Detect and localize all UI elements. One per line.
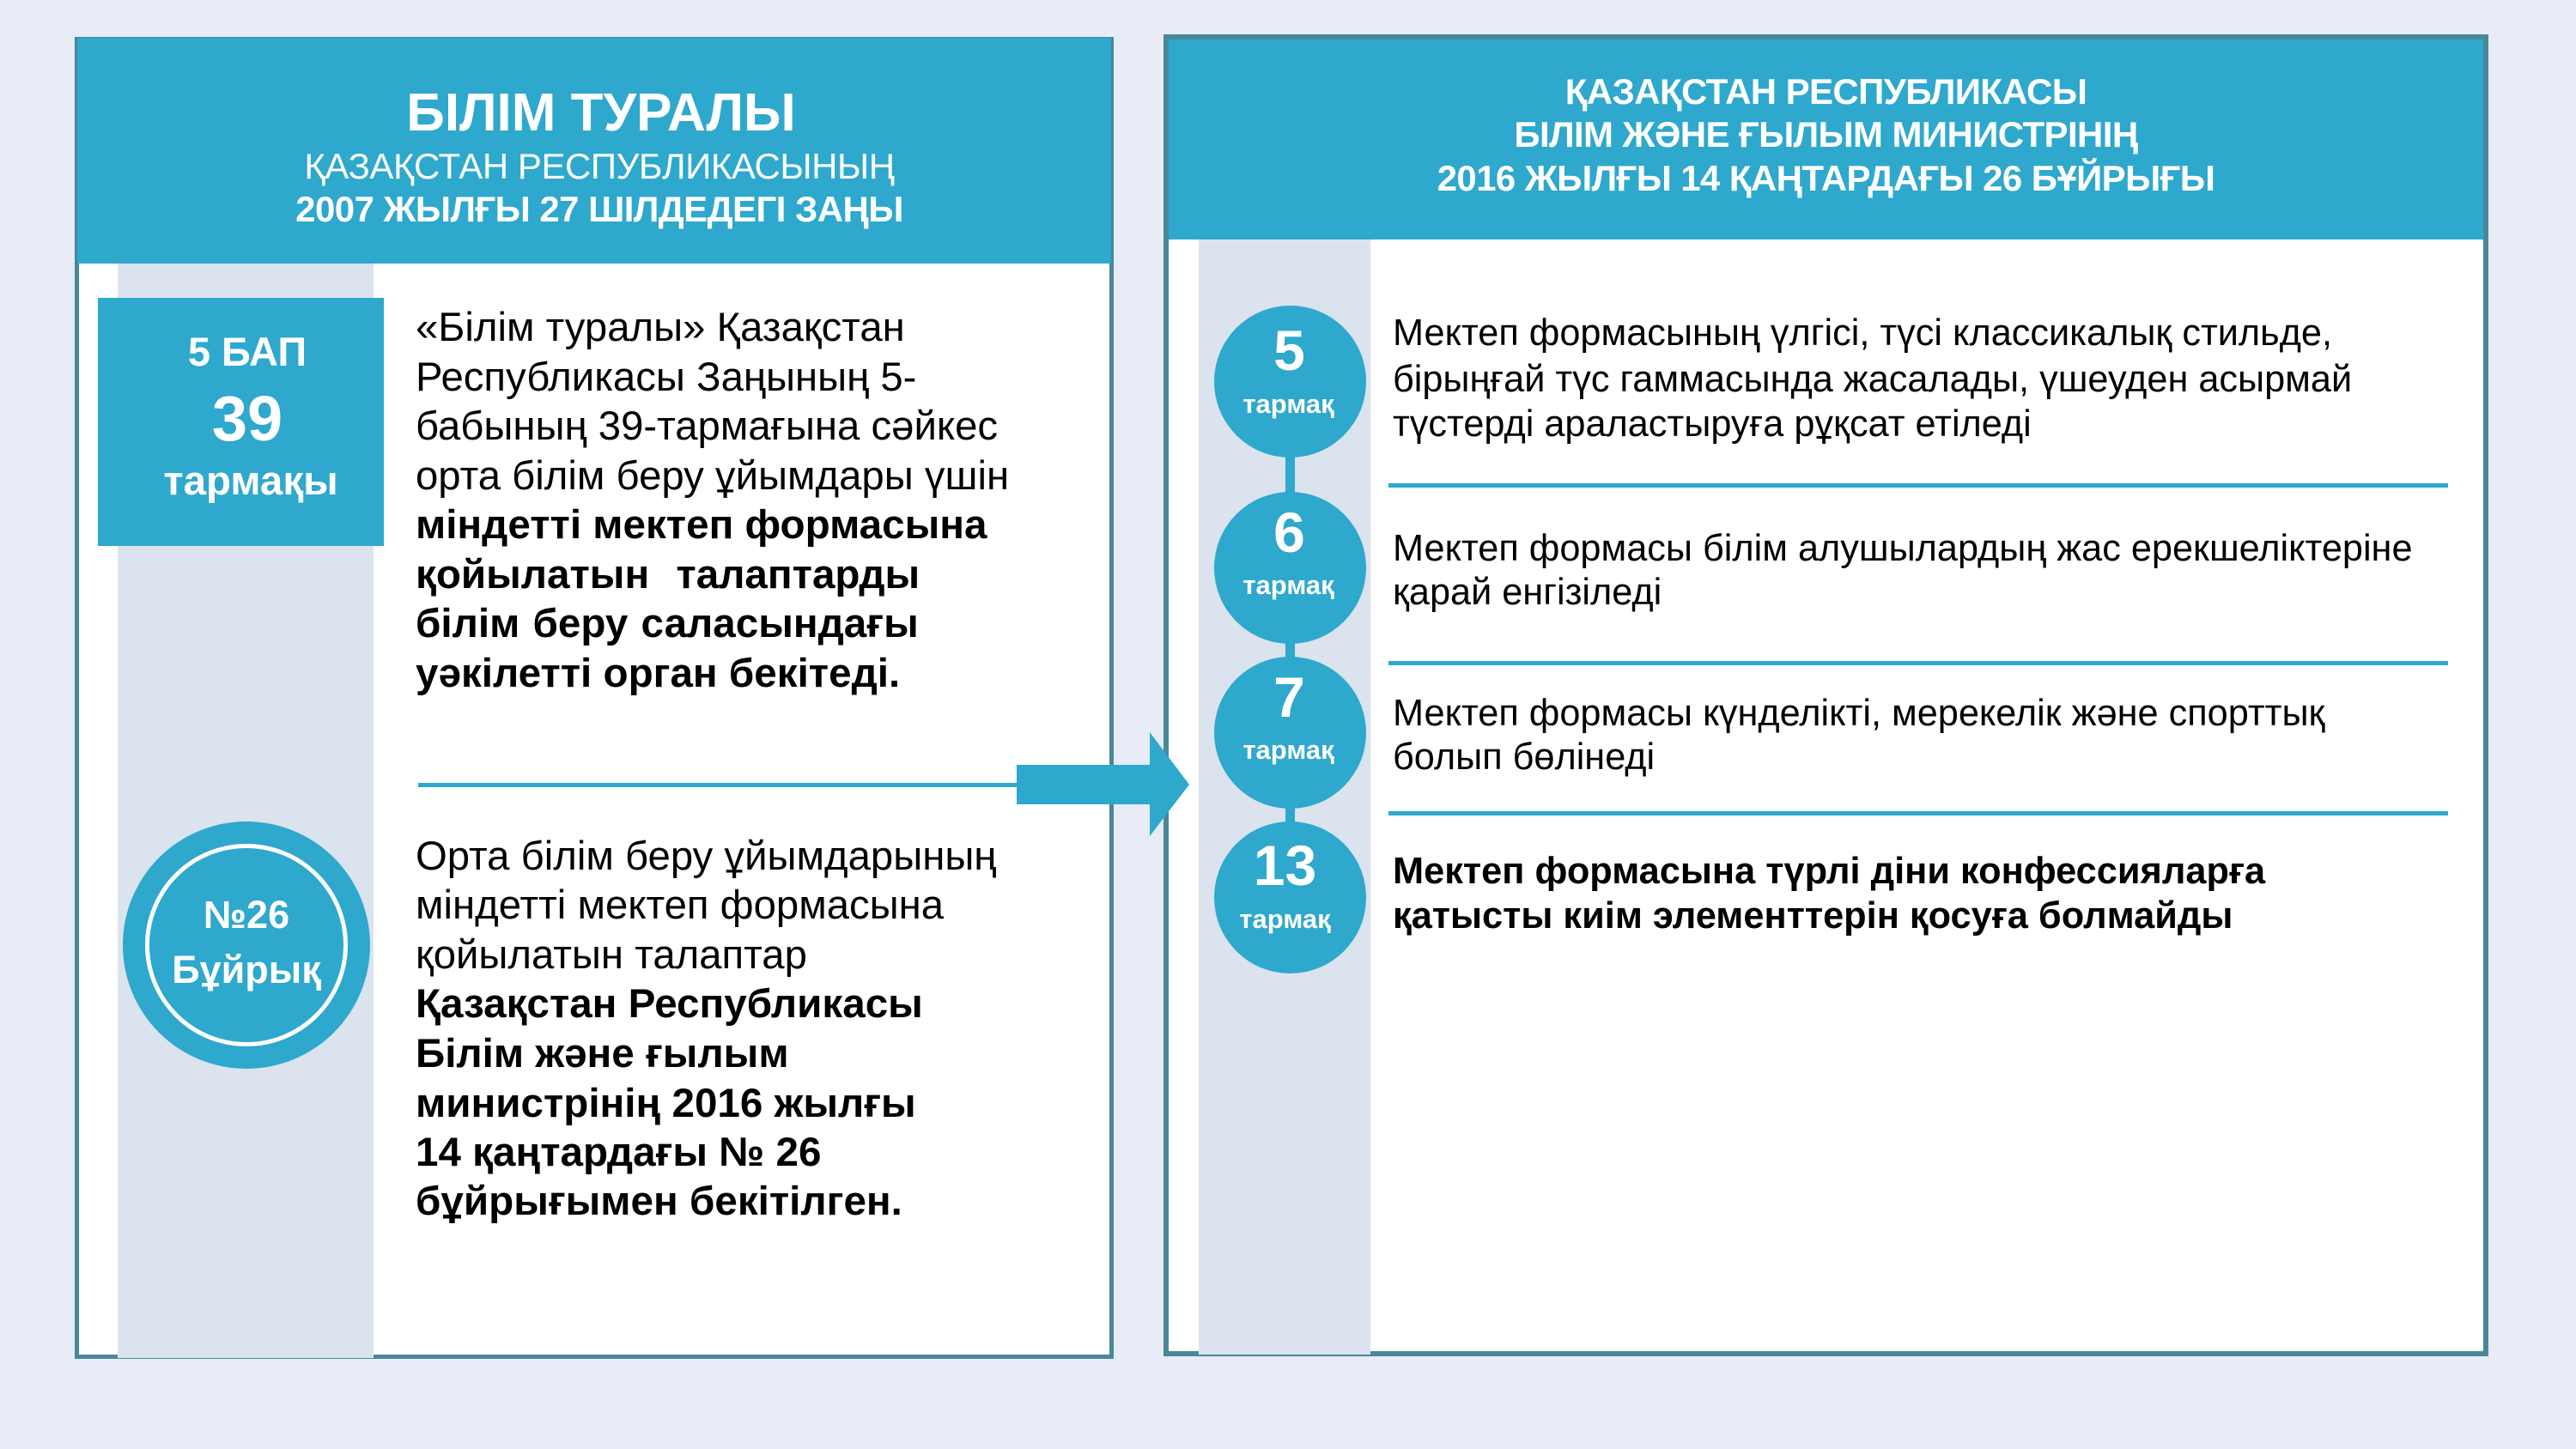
clause text 6: Мектеп формасы білім алушылардың жас ерекшеліктеріне <box>1393 528 2413 569</box>
badge: article 5 clause 39 <box>98 298 384 546</box>
clause number: 13 <box>1254 834 1316 897</box>
heading: law title: БІЛІМ ТУРАЛЫ <box>406 83 796 142</box>
heading line 2: БІЛІМ ЖӘНЕ ҒЫЛЫМ МИНИСТРІНІҢ <box>1514 114 2138 155</box>
text block: law requirement <box>416 305 1009 696</box>
text block: order description: міндетті мектеп формасына <box>416 882 944 928</box>
clause number: 7 <box>1273 665 1305 729</box>
text block: law requirement: уәкілетті орган бекітеді. <box>416 651 900 696</box>
badge: order 26 <box>123 822 370 1069</box>
clause text 5 <box>1393 312 2352 445</box>
text block: order description: министрінің 2016 жылғы <box>416 1081 916 1126</box>
text block: order description: Қазақстан Республикасы <box>416 981 923 1027</box>
text block: order description: Білім және ғылым <box>416 1031 789 1076</box>
side band: left panel <box>118 264 374 1358</box>
clause label: тармақ <box>1242 570 1334 600</box>
divider with arrow line <box>418 783 1019 787</box>
badge number: №26 <box>204 893 289 937</box>
clause text 5: Мектеп формасының үлгісі, түсі классикалық стильде, <box>1393 312 2332 354</box>
badge inner ring <box>145 844 348 1046</box>
clause text 13 <box>1393 851 2265 937</box>
divider 1 <box>1388 483 2448 488</box>
panel header: law on education <box>77 38 1111 264</box>
clause circle 7 <box>1214 657 1366 809</box>
clause label: тармақ <box>1242 735 1334 765</box>
text block: order description: қойылатын талаптар <box>416 932 807 978</box>
text block: law requirement: міндетті мектеп формасына <box>416 502 987 548</box>
clause text 6 <box>1393 528 2413 613</box>
panel header: ministry order <box>1169 39 2483 239</box>
clause circle 6 <box>1214 492 1366 644</box>
clause text 7 <box>1393 693 2325 778</box>
clause text 7: Мектеп формасы күнделікті, мерекелік және спорттық <box>1393 693 2324 734</box>
arrow: from order to ministry panel <box>1017 732 1189 836</box>
divider 3 <box>1388 811 2448 815</box>
subheading: date of law: 2007 ЖЫЛҒЫ 27 ШІЛДЕДЕГІ ЗАҢЫ <box>295 189 903 229</box>
text block: law requirement: қойылатын талаптарды <box>416 552 920 597</box>
badge line: article: 5 БАП <box>188 329 307 374</box>
text block: law requirement: бабының 39-тармағына сәйкес <box>416 403 998 449</box>
clause number: 6 <box>1273 500 1305 564</box>
heading line 1: ҚАЗАҚСТАН РЕСПУБЛИКАСЫ <box>1565 71 2087 112</box>
text block: order description: бұйрығымен бекітілген. <box>416 1179 902 1224</box>
clause text 13: Мектеп формасына түрлі діни конфессияларға <box>1393 851 2265 892</box>
text block: law requirement: «Білім туралы» Қазақстан <box>416 305 905 350</box>
clause circle 5 <box>1214 306 1366 458</box>
panel: ministry order <box>1163 34 2488 1356</box>
side band: right panel <box>1199 239 1370 1355</box>
text block: law requirement: Республикасы Заңының 5- <box>416 355 916 400</box>
text block: law requirement: орта білім беру ұйымдары үшін <box>416 453 1009 499</box>
subheading: republic: ҚАЗАҚСТАН РЕСПУБЛИКАСЫНЫҢ <box>304 146 895 186</box>
text block: order description: 14 қаңтардағы № 26 <box>416 1130 821 1175</box>
clause label: тармақ <box>1242 389 1334 419</box>
text block: order description: Орта білім беру ұйымдарының <box>416 834 996 879</box>
heading line 3: 2016 ЖЫЛҒЫ 14 ҚАҢТАРДАҒЫ 26 БҰЙРЫҒЫ <box>1437 158 2215 198</box>
badge number: 39 <box>212 383 283 454</box>
clause label: тармақ <box>1239 904 1331 934</box>
panel: law on education <box>75 37 1114 1359</box>
clause text 7: болып бөлінеді <box>1393 737 1655 778</box>
text block: order description <box>416 834 996 1224</box>
divider 2 <box>1388 661 2448 665</box>
clause text 5: түстерді араластыруға рұқсат етіледі <box>1393 403 2032 445</box>
badge label: Бұйрық <box>172 948 321 991</box>
badge line: clause: тармақы <box>163 458 338 504</box>
clause text 13: қатысты киім элементтерін қосуға болмайды <box>1393 895 2233 937</box>
connector between clause circles <box>1285 381 1295 897</box>
clause circle 13 <box>1214 822 1366 973</box>
clause text 6: қарай енгізіледі <box>1393 572 1662 613</box>
clause number: 5 <box>1273 318 1305 382</box>
text block: law requirement: білім беру саласындағы <box>416 601 919 646</box>
clause text 5: бірыңғай түс гаммасында жасалады, үшеуден асырмай <box>1393 359 2352 400</box>
